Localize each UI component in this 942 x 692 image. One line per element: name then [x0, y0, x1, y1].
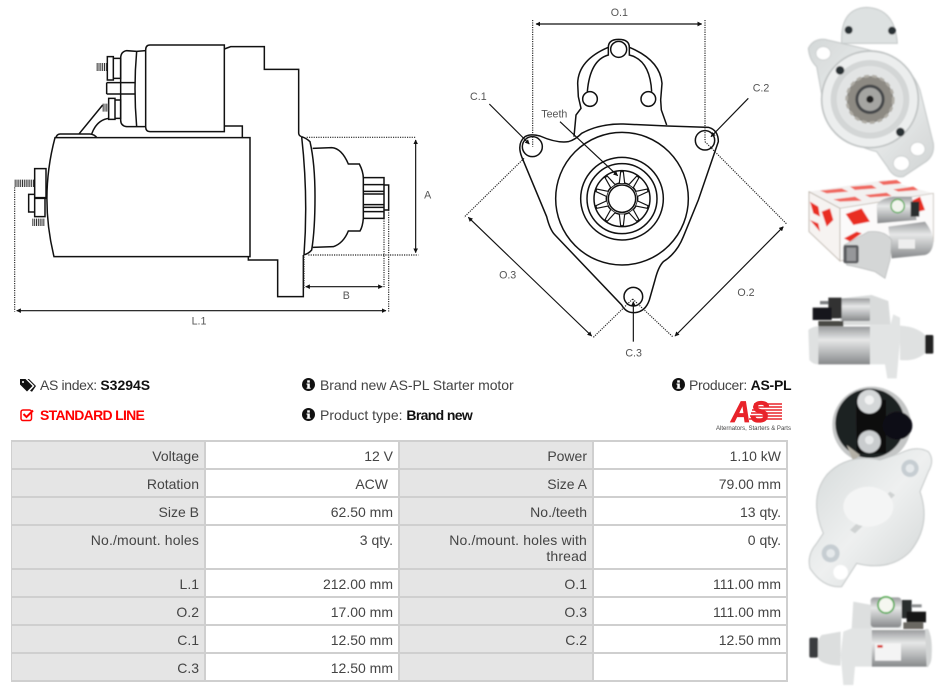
row: size B and teeth — [12, 498, 786, 524]
row: C.1 and C.2: 12.50 mm — [719, 632, 781, 648]
front view technical drawing: O.2 — [737, 287, 755, 299]
photo: front of starter — [808, 7, 934, 177]
front view technical drawing: Teeth — [541, 108, 567, 120]
front view technical drawing: C.2 — [753, 83, 769, 95]
description: Brand new AS-PL Starter motor — [320, 377, 514, 393]
row: rotation and size A: Size A — [547, 476, 587, 492]
row: O.2 and O.3 — [12, 598, 786, 624]
row: O.2 and O.3: O.2 — [176, 604, 199, 620]
side view technical drawing: B — [343, 290, 350, 302]
AS logo — [716, 398, 791, 432]
row: mounting holes: No./mount. holes with thread — [449, 532, 587, 564]
row: C.1 and C.2 — [12, 626, 786, 652]
row: C.3 — [12, 654, 786, 680]
row: rotation and size A: Rotation — [147, 476, 199, 492]
specification table — [11, 440, 788, 682]
row: mounting holes: 0 qty. — [748, 532, 781, 548]
photo: rear cover with mounting lugs — [809, 449, 932, 587]
front view technical drawing: C.3 — [625, 348, 642, 360]
photo: side view right — [809, 597, 932, 685]
row: voltage and power: 1.10 kW — [730, 448, 781, 464]
row: L.1 and O.1: 212.00 mm — [323, 576, 393, 592]
row: O.2 and O.3: O.3 — [564, 604, 587, 620]
row: L.1 and O.1: 111.00 mm — [713, 576, 781, 592]
photo: rear view — [832, 387, 912, 463]
row: L.1 and O.1: L.1 — [180, 576, 199, 592]
row: C.3: C.3 — [177, 660, 199, 676]
producer: Producer: AS-PL — [689, 377, 791, 393]
front view technical drawing: O.1 — [611, 7, 628, 19]
AS logo: Alternators, Starters & Parts — [716, 426, 791, 432]
row: size B and teeth: Size B — [159, 504, 199, 520]
photo: box with starter — [809, 180, 933, 278]
AS index: AS index: S3294S — [40, 377, 150, 393]
product info header — [20, 377, 792, 432]
row: O.2 and O.3: 111.00 mm — [713, 604, 781, 620]
product type: Product type: Brand new — [320, 407, 472, 423]
row: C.1 and C.2: C.1 — [177, 632, 199, 648]
row: L.1 and O.1 — [12, 570, 786, 596]
product photos column — [807, 6, 935, 686]
row: size B and teeth: 13 qty. — [740, 504, 781, 520]
standard line: STANDARD LINE — [40, 407, 144, 423]
side view technical drawing: A — [424, 189, 432, 201]
side view technical drawing — [14, 44, 432, 327]
photo: side view left — [808, 295, 933, 378]
row: voltage and power: Power — [547, 448, 587, 464]
row: L.1 and O.1: O.1 — [564, 576, 587, 592]
front view technical drawing: O.3 — [499, 269, 516, 281]
row: mounting holes: 3 qty. — [360, 532, 393, 548]
row: C.1 and C.2: C.2 — [565, 632, 587, 648]
side view technical drawing: L.1 — [192, 315, 206, 327]
front view technical drawing: C.1 — [470, 91, 487, 103]
row: voltage and power: Voltage — [152, 448, 199, 464]
row: C.1 and C.2: 12.50 mm — [331, 632, 393, 648]
row: voltage and power — [12, 442, 786, 468]
row: rotation and size A: 79.00 mm — [719, 476, 781, 492]
row: voltage and power: 12 V — [364, 448, 393, 464]
row: rotation and size A: ACW — [355, 476, 388, 492]
row: mounting holes: No./mount. holes — [91, 532, 199, 548]
row: size B and teeth: 62.50 mm — [331, 504, 393, 520]
row: rotation and size A — [12, 470, 786, 496]
row: size B and teeth: No./teeth — [530, 504, 587, 520]
row: C.3: 12.50 mm — [331, 660, 393, 676]
row: mounting holes — [12, 526, 786, 568]
front view technical drawing — [464, 7, 787, 360]
row: O.2 and O.3: 17.00 mm — [331, 604, 393, 620]
